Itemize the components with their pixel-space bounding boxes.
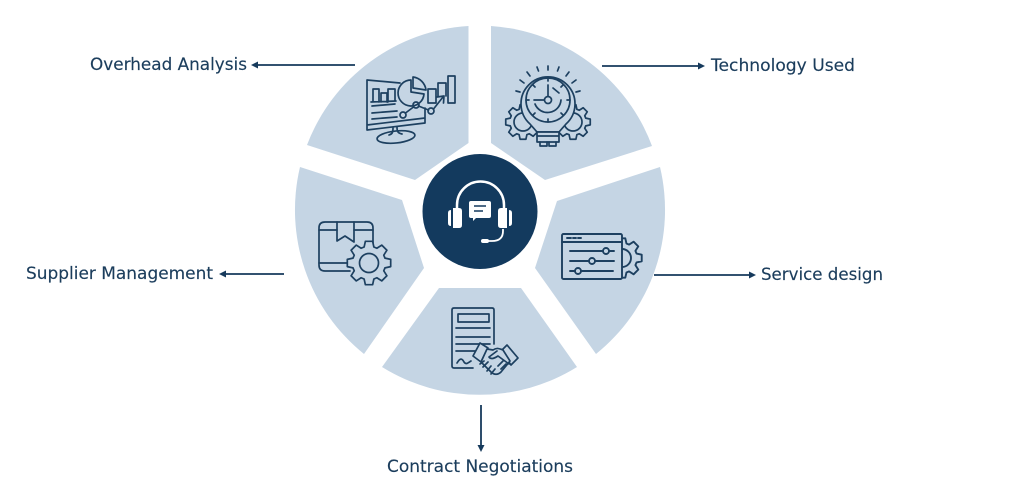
icon: monitor with charts (367, 76, 455, 145)
panel: supplier management segment (295, 167, 424, 354)
icon: center circle with headset (422, 154, 538, 269)
label: contract negotiations: Contract Negotiations (387, 457, 573, 477)
icon: box with gear (319, 222, 391, 285)
icon: contract and handshake (452, 308, 518, 374)
panel: overhead analysis segment (307, 26, 468, 180)
panel: service design segment (535, 167, 665, 354)
arrow: service design (654, 272, 756, 278)
label: technology used: Technology Used (710, 56, 855, 76)
label: supplier management: Supplier Management (26, 264, 213, 284)
label: service design: Service design (761, 265, 883, 285)
panel: technology used segment (491, 26, 652, 180)
label: overhead analysis: Overhead Analysis (90, 55, 247, 75)
icon: gauge light bulb with gears (506, 66, 590, 146)
icon: settings window with gear (562, 234, 642, 279)
arrow: technology used (602, 62, 705, 70)
arrow: overhead analysis (251, 62, 355, 68)
panel: contract negotiations segment (382, 288, 577, 395)
arrow: supplier management (219, 270, 284, 278)
arrow: contract negotiations (478, 405, 484, 452)
